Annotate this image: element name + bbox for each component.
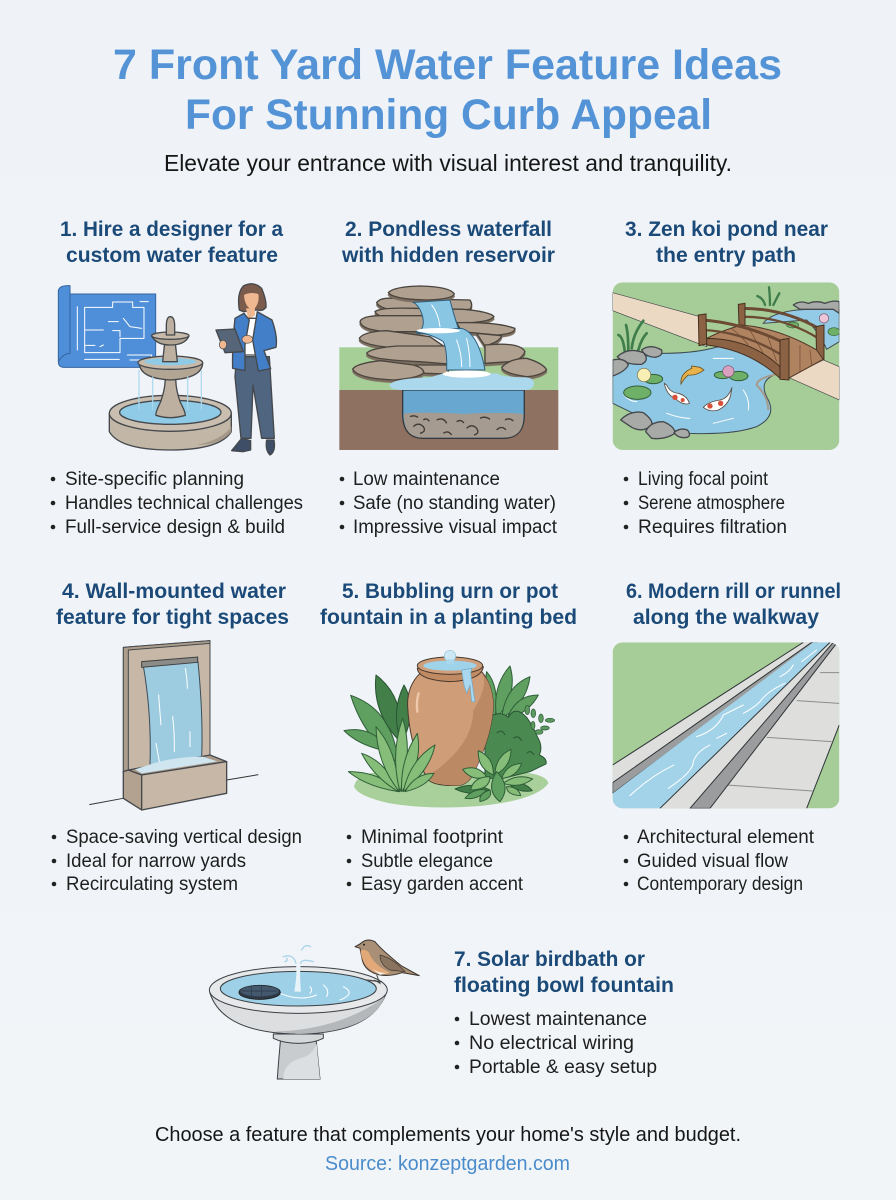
water (613, 642, 830, 808)
panel: 6. modern rill (613, 579, 841, 895)
bullet list 7: Lowest maintenance (469, 1009, 647, 1030)
heading 3: the entry path (656, 243, 796, 267)
bullet list 2: Safe (no standing water) (353, 493, 556, 514)
pool surface (389, 373, 534, 390)
ground (339, 347, 558, 450)
heading 5: fountain in a planting bed (320, 605, 577, 629)
bullet list 3: Requires filtration (638, 517, 787, 538)
heading 1: custom water feature (66, 243, 278, 267)
bullet list 7: Portable & easy setup (469, 1057, 657, 1078)
bullet list 5: Subtle elegance (361, 851, 493, 872)
pedestal (273, 1034, 323, 1079)
bullet list 4 (52, 827, 302, 895)
heading 2: with hidden reservoir (341, 243, 556, 267)
bowl (210, 992, 387, 1034)
bird (355, 940, 419, 983)
heading 3 (625, 217, 829, 267)
water rings and jet (280, 985, 349, 1000)
heading 1 (60, 217, 284, 267)
lawn (613, 642, 839, 808)
bullet list 5 (347, 827, 524, 895)
illustration: pondless waterfall cross-section (339, 286, 558, 450)
heading 2: 2. Pondless waterfall (345, 217, 552, 241)
paving (613, 642, 839, 808)
title: For Stunning Curb Appeal (185, 91, 712, 139)
source line: Source: konzeptgarden.com (325, 1153, 570, 1175)
bullet list 1: Full-service design & build (65, 517, 285, 538)
heading 2 (341, 217, 556, 267)
heading 3: 3. Zen koi pond near (625, 217, 829, 241)
water sheet (143, 662, 202, 765)
panel: 1. hire a designer (51, 217, 303, 538)
bullet list 6: Guided visual flow (637, 851, 788, 872)
heading 4: feature for tight spaces (56, 605, 289, 629)
heading 5 (320, 579, 577, 629)
panel: 5. bubbling urn (320, 579, 577, 895)
bullet list 1: Handles technical challenges (65, 493, 303, 514)
ground line (89, 775, 258, 805)
heading 7: floating bowl fountain (454, 973, 674, 997)
heading 7 (454, 947, 674, 997)
bullet list 4: Recirculating system (66, 874, 238, 895)
title: 7 Front Yard Water Feature Ideas (113, 41, 782, 89)
heading 7: 7. Solar birdbath or (454, 947, 646, 971)
illustration: urn fountain (344, 650, 555, 807)
bullet list 7: No electrical wiring (469, 1033, 634, 1054)
bullet list 5: Minimal footprint (361, 827, 504, 848)
cascades (413, 300, 491, 378)
bullet list 2 (340, 469, 558, 538)
bullet list 2: Low maintenance (353, 469, 500, 490)
bullet list 1: Site-specific planning (65, 469, 244, 490)
illustration: wall fountain (89, 641, 258, 810)
lawn (613, 282, 839, 450)
channel curb (690, 642, 837, 808)
wall slab (123, 641, 210, 773)
panel: 3. zen koi pond (613, 217, 840, 538)
designer figure (216, 284, 276, 455)
lawn patch (354, 772, 548, 807)
reservoir (403, 390, 524, 438)
heading 1: 1. Hire a designer for a (60, 217, 284, 241)
bullet list 4: Space-saving vertical design (66, 827, 302, 848)
panel: 4. wall-mounted feature (52, 579, 302, 895)
illustration: koi pond and bridge (613, 282, 840, 450)
panel: 2. pondless waterfall (339, 217, 558, 538)
bullet list 2: Impressive visual impact (353, 517, 558, 538)
heading 5: 5. Bubbling urn or pot (342, 579, 558, 603)
blueprint (58, 286, 156, 367)
main pond (613, 345, 777, 434)
foreground rocks and reeds (613, 287, 839, 439)
illustration: solar birdbath (209, 940, 419, 1079)
arched wooden bridge (698, 303, 824, 380)
heading 6: along the walkway (633, 605, 819, 629)
shrub (485, 705, 555, 778)
foreground grass clump (348, 718, 435, 792)
back plants (344, 666, 538, 763)
panel: 7. solar birdbath (209, 940, 674, 1079)
heading 6: 6. Modern rill or runnel (626, 579, 841, 603)
bullet list 6: Contemporary design (637, 874, 803, 895)
lily pads and flowers (624, 314, 840, 399)
illustration: blueprint, fountain and designer (58, 284, 276, 455)
bullet list 6: Architectural element (637, 827, 815, 848)
bullet list 6 (624, 827, 815, 895)
heading 4 (56, 579, 289, 629)
subtitle: Elevate your entrance with visual interest and tranquility. (164, 150, 732, 176)
back pond (763, 309, 839, 349)
basin (123, 755, 227, 810)
bullet list 5: Easy garden accent (361, 874, 524, 895)
solar panel (239, 985, 280, 999)
tiered fountain (109, 317, 231, 450)
bullet list 3 (624, 469, 787, 538)
bullet list 3: Living focal point (638, 469, 769, 490)
entry path (613, 293, 839, 400)
bullet list 3: Serene atmosphere (638, 493, 785, 514)
bullet list 7 (455, 1009, 657, 1078)
title (113, 41, 782, 139)
footer note: Choose a feature that complements your home's style and budget. (155, 1124, 741, 1146)
channel wall (613, 642, 817, 793)
koi fish (664, 366, 732, 411)
heading 6 (626, 579, 841, 629)
stacked rocks (353, 286, 547, 380)
heading 4: 4. Wall-mounted water (62, 579, 287, 603)
spout (142, 657, 198, 667)
terracotta urn (408, 650, 493, 786)
bullet list 4: Ideal for narrow yards (66, 851, 246, 872)
illustration: modern rill (613, 642, 839, 808)
foreground hosta (455, 749, 533, 802)
bullet list 1 (51, 469, 303, 538)
